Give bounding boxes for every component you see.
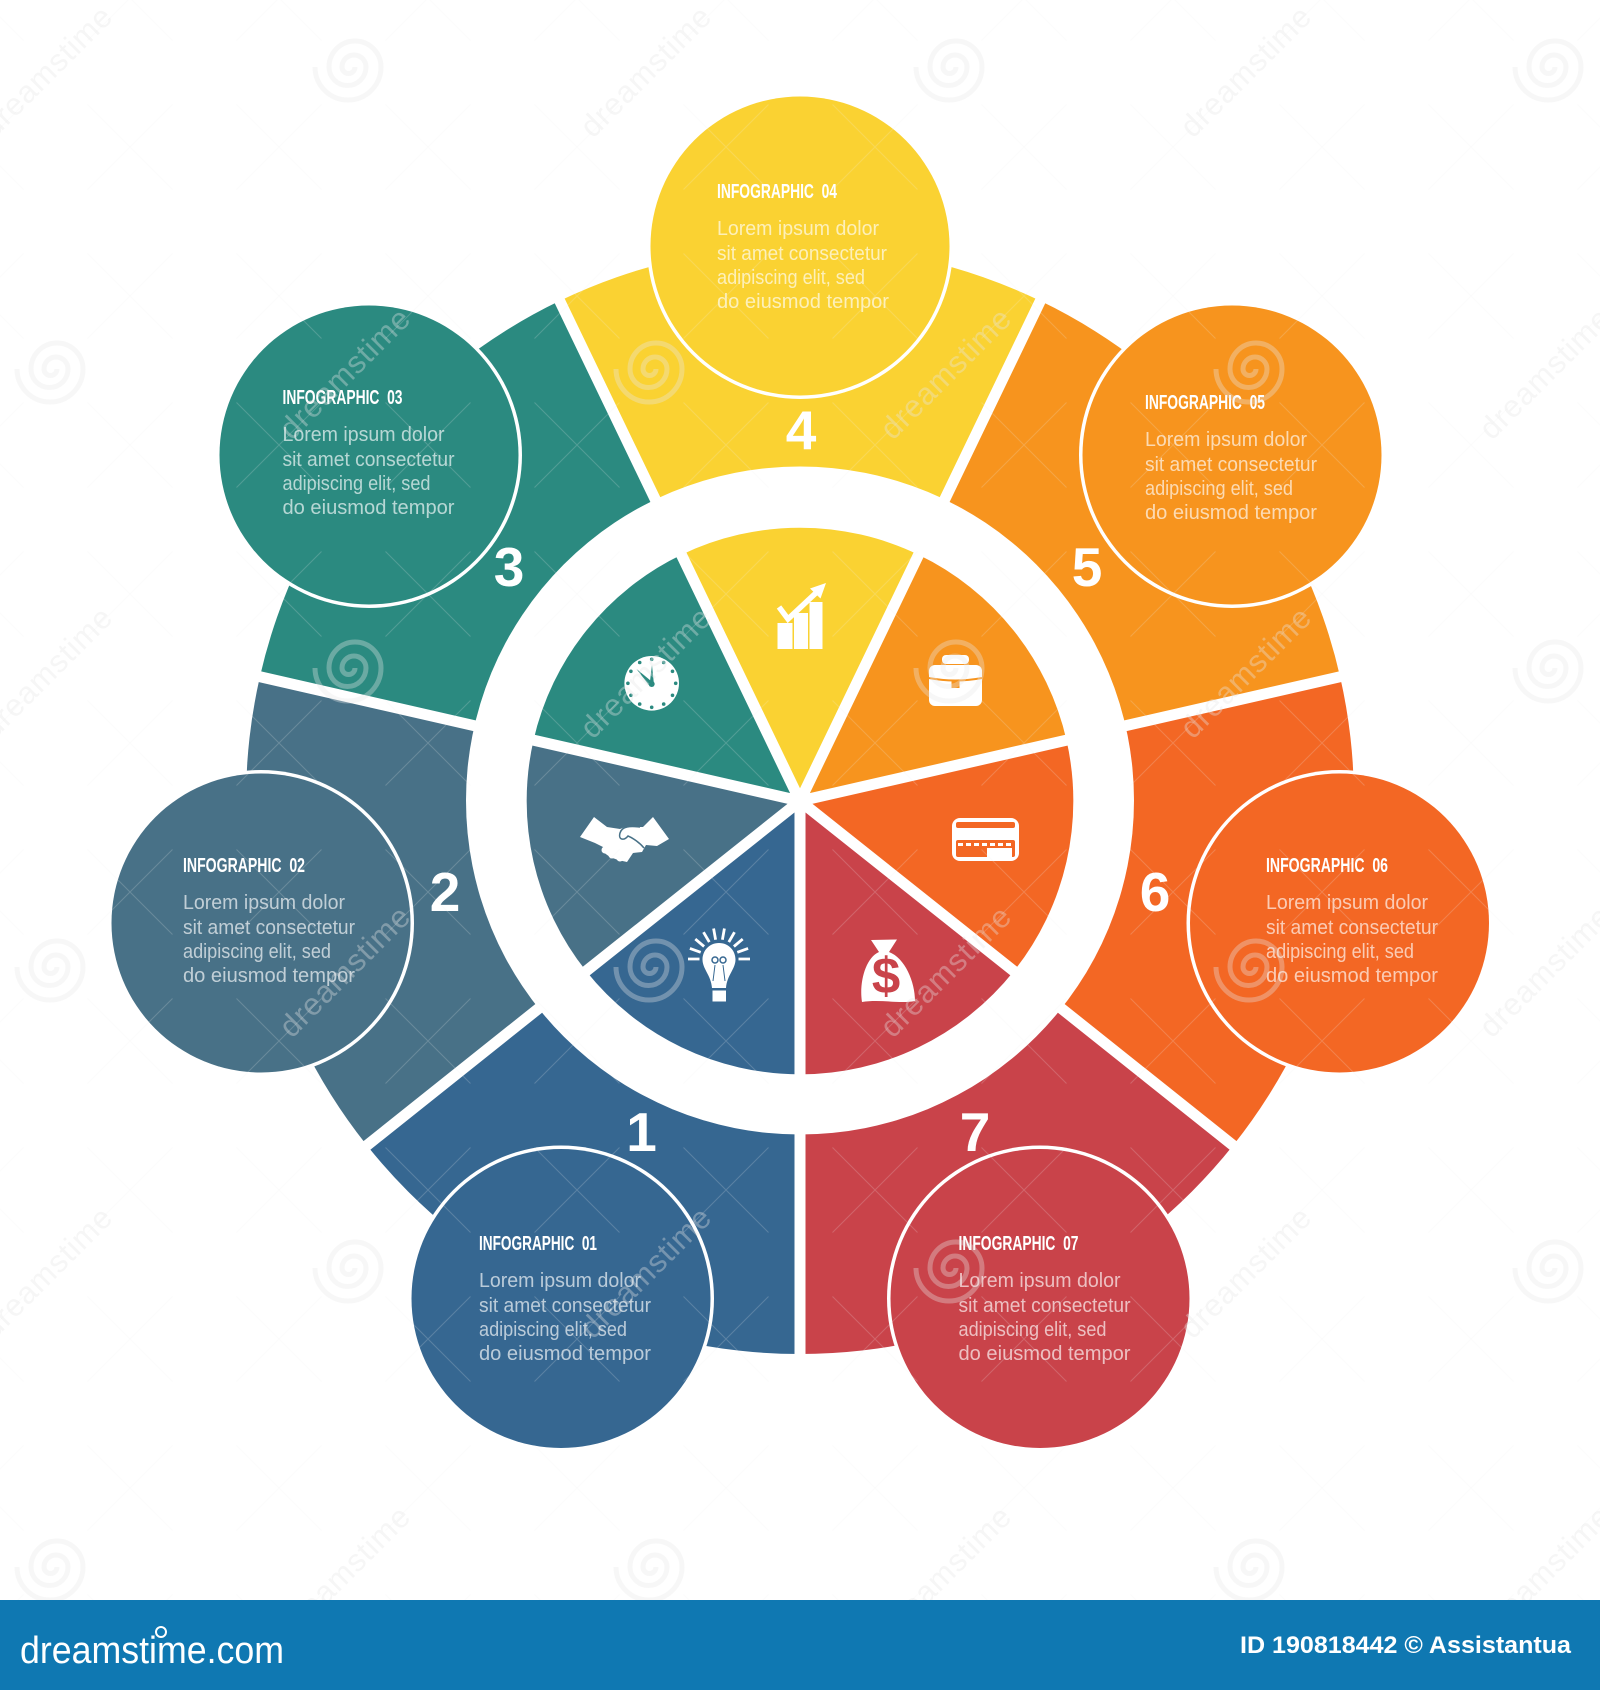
watermark text: dreamstime [873, 1499, 1018, 1644]
segment 1 blue [367, 800, 800, 1354]
body text 05: Lorem ipsum dolor [1145, 429, 1307, 451]
body text 03: adipiscing elit, sed [282, 473, 430, 495]
icon: handshake [580, 817, 669, 862]
footer logo spiral [156, 1627, 166, 1637]
watermark text: dreamstime [873, 301, 1018, 446]
body text 02 [183, 892, 355, 987]
body text 05: do eiusmod tempor [1145, 502, 1317, 524]
body text 02: Lorem ipsum dolor [183, 892, 345, 914]
info circle 4 [647, 93, 953, 399]
segment numbers: 4 [786, 399, 817, 461]
body text 05 [1145, 429, 1317, 524]
icon: rising bar chart [778, 583, 826, 649]
body text 05: sit amet consectetur [1145, 454, 1317, 476]
title 06: INFOGRAPHIC 06 [1266, 855, 1388, 877]
body text 07: sit amet consectetur [958, 1295, 1131, 1317]
watermark text: dreamstime [573, 0, 718, 144]
icon: credit card [952, 818, 1019, 861]
segment 2 slate [246, 677, 800, 1145]
watermark text: dreamstime [272, 301, 417, 446]
info circle 6 [1186, 770, 1492, 1076]
body text 04: adipiscing elit, sed [717, 267, 865, 289]
watermark text: dreamstime [873, 899, 1018, 1044]
icon: light bulb [688, 928, 750, 1002]
segment 6 deep orange [800, 677, 1354, 1145]
title 04: INFOGRAPHIC 04 [717, 181, 838, 203]
title 02: INFOGRAPHIC 02 [183, 855, 305, 877]
info circle 5 [1079, 302, 1385, 608]
info circle 2 [108, 770, 414, 1076]
body text 07: Lorem ipsum dolor [958, 1270, 1121, 1292]
footer bar [0, 1600, 1600, 1690]
segment 3 teal [260, 301, 800, 800]
body text 02: adipiscing elit, sed [183, 941, 331, 963]
segment numbers: 3 [494, 536, 524, 598]
segment numbers: 5 [1072, 536, 1102, 598]
body text 01: do eiusmod tempor [479, 1343, 651, 1365]
central pie of seven wedges [521, 528, 1079, 1087]
watermark text: dreamstime [573, 1200, 718, 1345]
body text 03: do eiusmod tempor [282, 497, 455, 519]
info circle 3 [216, 302, 522, 608]
body text 04: do eiusmod tempor [717, 291, 889, 313]
icon: money bag [861, 940, 915, 1004]
body text 04 [717, 218, 889, 313]
title 01: INFOGRAPHIC 01 [479, 1233, 597, 1255]
body text 01: adipiscing elit, sed [479, 1319, 627, 1341]
body text 06: adipiscing elit, sed [1266, 941, 1414, 963]
body text 02: do eiusmod tempor [183, 965, 355, 987]
body text 06: Lorem ipsum dolor [1266, 892, 1428, 914]
wedge 3 teal [534, 555, 800, 801]
footer credit text: ID 190818442 © Assistantua [1240, 1632, 1572, 1659]
segment numbers [430, 399, 1170, 1163]
watermark text: dreamstime [573, 600, 718, 745]
wedge 7 red [800, 801, 1014, 1074]
icon: money bag: $ [872, 947, 900, 1004]
watermark text: dreamstime [1173, 600, 1318, 745]
footer logo text: dreamstime.com [20, 1630, 284, 1672]
title 03: INFOGRAPHIC 03 [282, 387, 402, 409]
title 05: INFOGRAPHIC 05 [1145, 392, 1265, 414]
body text 07 [958, 1270, 1131, 1365]
segment 5 orange [800, 301, 1340, 800]
segment numbers: 2 [430, 861, 460, 923]
wedge 1 blue [586, 801, 800, 1074]
segment numbers: 6 [1140, 861, 1170, 923]
body text 01: sit amet consectetur [479, 1295, 651, 1317]
body text 02: sit amet consectetur [183, 917, 355, 939]
icon: briefcase [929, 655, 982, 706]
wedge 2 slate [527, 740, 800, 971]
icon: clock [624, 656, 679, 711]
outer ring of seven coloured segments [244, 246, 1356, 1370]
watermark text: dreamstime [1173, 1200, 1318, 1345]
segment numbers: 7 [960, 1101, 990, 1163]
body text 03: sit amet consectetur [282, 449, 455, 471]
body text 06: do eiusmod tempor [1266, 965, 1438, 987]
info circle 1 [408, 1146, 714, 1452]
segment numbers: 1 [626, 1101, 657, 1163]
body text 06 [1266, 892, 1438, 987]
info circle 7 [887, 1146, 1193, 1452]
wedge 5 orange [800, 555, 1066, 801]
body text 07: do eiusmod tempor [958, 1343, 1131, 1365]
body text 01 [479, 1270, 651, 1365]
segment 7 red [800, 800, 1233, 1354]
watermark text: dreamstime [272, 1499, 417, 1644]
body text 04: Lorem ipsum dolor [717, 218, 879, 240]
body text 01: Lorem ipsum dolor [479, 1270, 641, 1292]
segment 4 yellow [560, 246, 1040, 800]
body text 03: Lorem ipsum dolor [282, 424, 445, 446]
watermark text: dreamstime [272, 899, 417, 1044]
watermark text: dreamstime [1173, 0, 1318, 144]
body text 04: sit amet consectetur [717, 243, 887, 265]
wedge 6 deep orange [800, 740, 1073, 971]
title 07: INFOGRAPHIC 07 [958, 1233, 1078, 1255]
body text 06: sit amet consectetur [1266, 917, 1438, 939]
body text 07: adipiscing elit, sed [958, 1319, 1106, 1341]
body text 03 [282, 424, 455, 519]
wedge 4 yellow [681, 528, 919, 801]
body text 05: adipiscing elit, sed [1145, 478, 1293, 500]
